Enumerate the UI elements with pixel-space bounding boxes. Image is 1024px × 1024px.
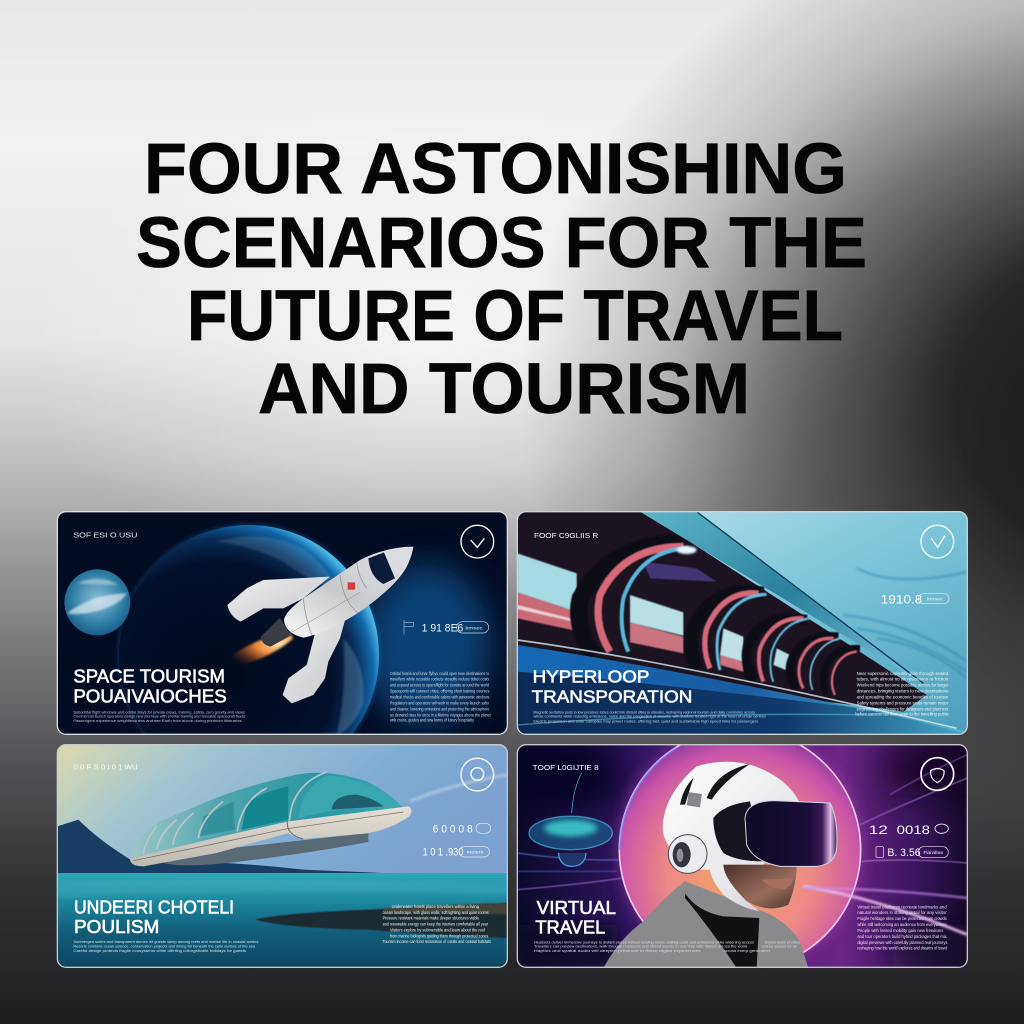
heading <box>75 900 233 934</box>
caption: Submerged suites and transparent domes let guests sleep among reefs and marine life in coastal waters <box>73 939 258 944</box>
caption: Commercial launch operators design new journeys with shorter training and reusable spacecraft fleets <box>73 714 245 719</box>
body text: before commercial lines open to the travelling public <box>855 712 949 717</box>
icon: hologram disc <box>529 773 612 866</box>
body text <box>390 671 491 723</box>
icon: check circle <box>461 525 494 558</box>
body text <box>857 905 947 950</box>
sea <box>57 873 507 968</box>
stats: Parallax <box>923 850 944 855</box>
panel: underwater hotel <box>57 745 507 968</box>
body text: Pressure resistant materials make deeper structures viable <box>383 916 480 921</box>
body text: Virtual travel platforms recreate landmarks and <box>857 905 947 910</box>
caption <box>534 939 800 953</box>
caption: Suborbital flight windows and orbital stays for private crews, training, safety, zero gravity and views <box>73 709 245 714</box>
stats: 6 0 0 0 8 <box>433 824 473 836</box>
label: top tag: TOOF L0GIJTIE 8 <box>533 763 599 772</box>
body text: digital previews with carefully planned real journeys <box>857 940 947 945</box>
body text: while still welcoming an audience from everywhere <box>857 922 947 927</box>
halo <box>617 726 863 973</box>
title <box>136 130 867 429</box>
speed lines <box>517 755 967 890</box>
title: FOUR ASTONISHING <box>144 130 847 209</box>
heading: TRANSPORATION <box>532 686 692 706</box>
light streak <box>803 886 967 935</box>
mountains <box>58 820 384 873</box>
icon: small planet <box>64 569 130 635</box>
caption: Passengers experience weightlessness and see Earth from above during premium itineraries <box>73 718 242 723</box>
panel: virtual travel <box>517 726 967 973</box>
stat: 1 91 8E6 <box>422 623 463 635</box>
icon: check circle <box>921 525 954 558</box>
caption: Magnetic levitation pods in low pressure tubes could link distant cities in minutes, reshaping regional tourism and daily commutes across <box>533 709 755 714</box>
title: FUTURE OF TRAVEL <box>187 277 843 356</box>
body text: as demand rises for once in a lifetime voyages above the planet <box>390 712 491 717</box>
stat: kmsec <box>465 625 484 630</box>
label: top tag: SOF ESI O USU <box>73 531 137 540</box>
caption: Digital twins of cities <box>765 939 800 944</box>
icon: floating capsule <box>130 772 411 866</box>
earth <box>116 522 382 734</box>
caption <box>74 940 258 953</box>
body text: Fragile heritage sites can be protected from crowds <box>857 916 947 921</box>
tube rings <box>578 542 860 695</box>
body text: Tourism income can fund restoration of corals and coastal habitats <box>383 939 491 944</box>
stats: meters <box>467 850 483 855</box>
body text: Orbital hotels and lunar flybys could open new destinations to <box>390 671 490 676</box>
body text: ocean landscape, with glass walls, soft lighting and quiet rooms <box>383 910 489 915</box>
caption <box>74 711 245 723</box>
stat <box>404 620 489 635</box>
stats <box>423 823 491 858</box>
title: AND TOURISM <box>258 350 750 429</box>
label: top tag: 0 0 F S 0 I 0 1 WU <box>73 762 138 771</box>
heading: UNDEERI CHOTELI <box>74 896 234 917</box>
caption: Haptics and spatial audio will deepen presence in these digital experiences <box>534 948 701 953</box>
icon: ring circle <box>461 758 494 791</box>
body text: and renewable energy can keep the interiors comfortable all year <box>383 921 488 926</box>
title: SCENARIOS FOR THE <box>136 204 867 283</box>
heading: POULISM <box>74 916 159 937</box>
body text <box>383 904 491 944</box>
caption: Electric propulsion and solar canopies may power routes, offering fast, quiet and sustainable high speed links for passengers <box>533 718 758 723</box>
blue swoosh <box>517 645 967 734</box>
body text: and tour operators build hybrid packages that mix <box>857 934 947 939</box>
body text: Near supersonic capsules glide through sealed <box>857 671 949 676</box>
panel: space tourism <box>56 511 508 735</box>
body text: Visitors explore by submersible and learn about the reef <box>390 927 486 932</box>
stat: 1910.8 <box>881 592 923 606</box>
body text: Spaceports will connect cities, offering short training courses <box>390 688 489 693</box>
heading <box>535 897 616 937</box>
heading <box>532 670 692 703</box>
heading: POUAIVAIOCHES <box>73 686 227 707</box>
heading: TRAVEL <box>535 916 605 937</box>
icon: VR helmet <box>663 762 837 911</box>
body text: and cleaner, lowering emissions and protecting the atmosphere <box>390 706 490 711</box>
caption: Resorts combine ocean science, conservation projects and dining far beneath the calm surface of the sea <box>73 943 256 948</box>
panel: hyperloop <box>517 512 967 734</box>
stats: 1 0 1 .930 <box>423 846 463 858</box>
body text <box>855 671 949 717</box>
teal beam <box>640 512 923 683</box>
caption: Careful design protects fragile ecosystems while offering unforgettable holidays for guests <box>73 948 246 953</box>
island shadow <box>255 903 507 938</box>
caption: across every generation <box>723 948 770 953</box>
icon: rocket <box>222 547 413 703</box>
stats <box>869 823 948 859</box>
icon: shield circle <box>921 758 954 790</box>
body text: Underwater hotels place travellers within a living <box>392 904 480 909</box>
body text: Safety systems and pressure seals remain major <box>857 700 949 705</box>
body text: and expand access to spaceflight for tourists around the world <box>390 682 490 687</box>
stat <box>882 593 950 604</box>
body text: medical checks and comfortable cabins with panoramic windows <box>390 694 489 699</box>
body text: natural wonders in striking detail for any visitor <box>857 910 947 915</box>
heading: VIRTUAL <box>537 897 616 918</box>
caption: extend access for all <box>762 944 797 949</box>
body text: People with limited mobility gain new freedoms <box>857 928 943 933</box>
person <box>603 865 808 968</box>
heading: HYPERLOOP <box>533 667 649 687</box>
body text: with crews, guides and new forms of luxury hospitality <box>390 718 475 723</box>
stats: B. 3.56 <box>887 847 921 859</box>
body text: and spreading the economic benefits of tourism <box>857 694 949 699</box>
body text: reshaping how the world explores and dreams of travel <box>857 945 947 950</box>
tube structure <box>517 512 927 712</box>
body text: tubes, with almost no air resistance or friction <box>857 676 949 681</box>
body text: travellers while reusable rockets steadily reduce ticket costs <box>390 676 489 681</box>
body text: Regulators and operators will work to make every launch safer <box>390 700 490 705</box>
body text: distances, bringing visitors to new destinations <box>857 688 948 693</box>
body text: Weekend trips become possible across far larger <box>857 682 949 687</box>
stats: 0018 <box>897 823 930 837</box>
caption: Headsets deliver immersive journeys to distant places without leaving home, cutting costs and emissions while widening access <box>534 939 754 944</box>
label: top tag: FOOF C9GLIIS R <box>534 531 598 540</box>
caption <box>533 711 766 724</box>
body text: engineering challenges for designers and planners <box>857 706 948 711</box>
body text: from marine biologists guiding them through protected zones <box>390 933 488 938</box>
caption: whole continents while reducing emissions, noise and the congestion of airports, with stations located right at the heart of urban centres <box>533 714 766 719</box>
heading: SPACE TOURISM <box>73 666 225 687</box>
stat: kmsec <box>927 596 944 601</box>
heading <box>74 669 226 703</box>
stats: 12 <box>869 823 888 837</box>
caption: Travellers can preview destinations, walk through museums and attend events in real time with friends across the world <box>534 944 747 949</box>
